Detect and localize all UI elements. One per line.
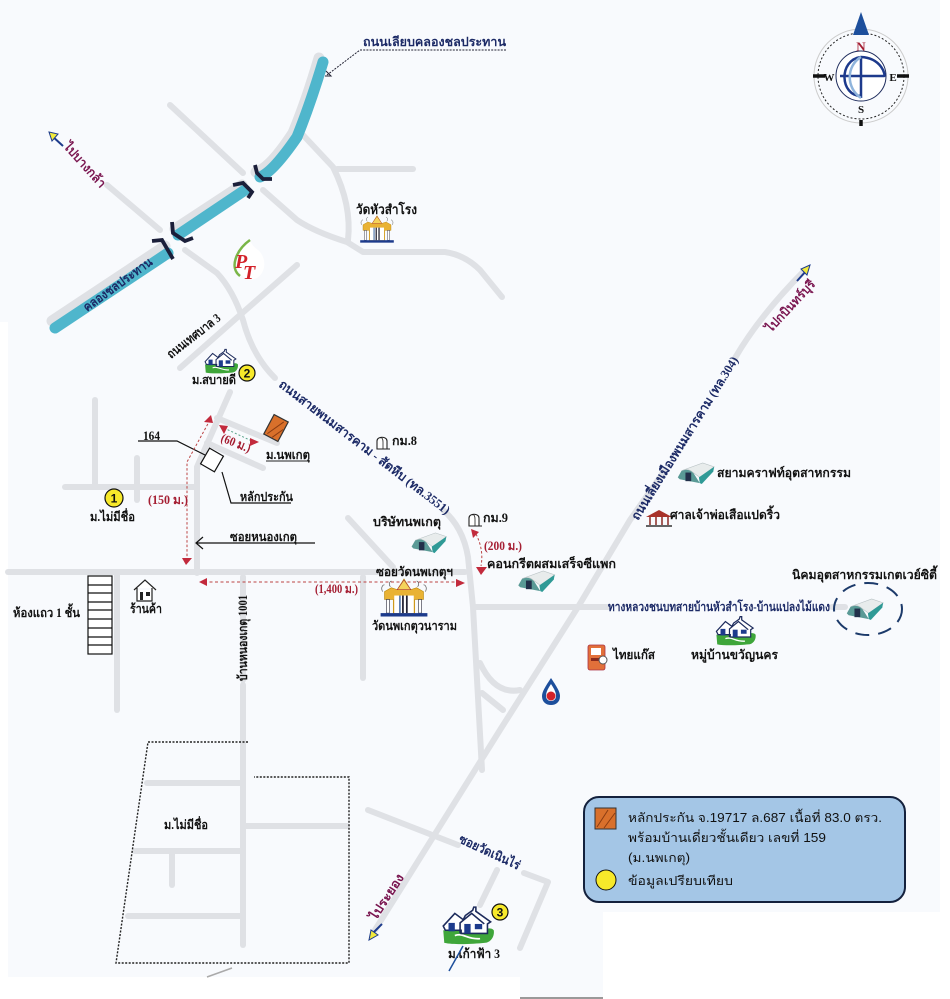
subject parcel [264, 415, 288, 441]
label: Soi Nong Ket arrow: ซอยหนองเกตุ [230, 530, 297, 545]
legend text: parcel: พร้อมบ้านเดี่ยวชั้นเดียว เลขที่ 159 [628, 828, 826, 845]
distance 200 m [471, 529, 522, 575]
compass: S [858, 104, 864, 116]
arrow: to Kabin Buri [797, 265, 810, 281]
label: shop: ร้านค้า [130, 602, 162, 616]
label: Kao Fa 3 [448, 946, 500, 971]
icon: PT logo [234, 240, 264, 284]
km 8 [377, 434, 417, 449]
badge 2: 2 [244, 366, 251, 380]
callout: collateral: หลักประกัน [240, 490, 293, 504]
factory: Siam Kraft: สยามคราฟท์อุตสาหกรรม [717, 465, 851, 481]
village 3 [443, 907, 494, 944]
label: Wat Nopphaket: วัดนพเกตุวนาราม [372, 619, 457, 634]
distance 1400 m [199, 578, 465, 596]
badge 3: 3 [497, 906, 504, 920]
compass: E [889, 72, 897, 84]
industrial estate: นิคมอุตสาหกรรมเกตเวย์ซิตี้ [792, 565, 938, 583]
label: Sabaidee village: ม.สบายดี [192, 373, 236, 387]
factory: Nopphaket company [373, 515, 446, 553]
label: municipal road 3: ถนนเทศบาล 3 [164, 311, 223, 361]
shrine: ศาลเจ้าพ่อเสือแปดริ้ว [670, 505, 780, 522]
shrine [646, 505, 780, 526]
legend text: parcel: หลักประกัน จ.19717 ล.687 เนื้อที่ 83.0 ตรว. [628, 808, 882, 825]
label: canal name: คลองชลประทาน [81, 255, 155, 314]
label: highway 304: ถนนเลี่ยงเมืองพนมสารคาม (ทล.304) [627, 353, 741, 523]
label: canal road: ถนนเลียบคลองชลประทาน [363, 35, 506, 49]
label: unnamed village 1: ม.ไม่มีชื่อ [90, 508, 135, 524]
distance 60 m: (60 ม.) [219, 431, 253, 455]
label: row houses: ห้องแถว 1 ชั้น [13, 603, 80, 620]
scan mark [207, 968, 232, 977]
legend text: parcel [628, 808, 882, 866]
distance 1400 m: (1,400 ม.) [315, 582, 358, 596]
label: highway 3551: ถนนสายพนมสารคาม - สัตหีบ (ทล.3551) [276, 377, 453, 517]
legend swatch: comparison [596, 870, 616, 890]
legend swatch: parcel [595, 808, 616, 829]
gas station: ไทยแก๊ส [611, 647, 655, 662]
icon: Wat Nopphaket [381, 579, 427, 617]
factory: Nopphaket company: บริษัทนพเกตุ [373, 515, 441, 530]
icon: PT logo: P [234, 251, 248, 273]
label: to Bang Khla: ไปบางกล้า [59, 138, 109, 191]
industrial estate [792, 565, 938, 635]
distance 150 m [148, 415, 213, 565]
distance 200 m: (200 ม.) [484, 539, 522, 553]
label: to Kabin Buri: ไปกบินทร์บุรี [761, 276, 819, 337]
icon: PTT [542, 678, 560, 705]
label: Ban Nong Ket road: บ้านหนองเกตุ 1001 [236, 595, 251, 681]
label: Wat Hua Samrong: วัดหัวสำโรง [356, 201, 417, 217]
km 9 [469, 511, 508, 526]
label: Soi Nong Ket arrow [196, 530, 315, 549]
distance 150 m: (150 ม.) [148, 493, 188, 507]
label: canal road [325, 35, 506, 76]
label: rural highway: ทางหลวงชนบทสายบ้านหัวสำโรง-บ้านแปลงไม้แดง [608, 599, 830, 614]
km 9: กม.9 [483, 511, 508, 525]
label: Kao Fa 3: ม.เก้าฟ้า 3 [448, 947, 500, 961]
village: Khwan Nakhon [691, 617, 778, 663]
legend text: parcel: (ม.นพเกตุ) [628, 851, 690, 866]
callout: collateral [222, 472, 293, 504]
icon: shop [134, 580, 156, 601]
label: Soi Wat Nopphaket: ซอยวัดนพเกตุฯ [376, 565, 453, 580]
arrow: to Rayong [369, 924, 382, 940]
compass [813, 12, 909, 126]
arrow: to Bang Khla [49, 132, 63, 146]
canal [55, 62, 323, 328]
factory: CPAC concrete: คอนกรีตผสมเสร็จซีแพก [487, 556, 616, 571]
badge 3 [492, 904, 508, 920]
bridge brackets [152, 165, 272, 259]
compass: N [856, 39, 866, 54]
factory: Siam Kraft [678, 463, 851, 484]
gas station [588, 645, 655, 670]
factory: CPAC concrete [487, 556, 616, 592]
plot 164: 164 [143, 429, 161, 443]
badge 1: 1 [111, 492, 118, 506]
icon: PT logo: T [243, 262, 256, 284]
label: Nopphaket village: ม.นพเกตุ [266, 448, 310, 463]
icon: village 2 [205, 349, 238, 373]
legend panel [584, 797, 905, 902]
village: Khwan Nakhon: หมู่บ้านขวัญนคร [691, 648, 778, 663]
badge 1 [105, 489, 123, 507]
label: to Rayong: ไประยอง [365, 871, 407, 924]
row houses block [88, 576, 112, 654]
icon: temple small [360, 216, 394, 243]
legend text: comparison: ข้อมูลเปรียบเทียบ [628, 874, 733, 889]
road network [8, 58, 845, 948]
label: unnamed estate: ม.ไม่มีชื่อ [164, 816, 208, 832]
badge 2 [239, 365, 255, 381]
compass: W [824, 72, 834, 84]
km 8: กม.8 [392, 434, 417, 448]
plot 164 [138, 429, 223, 472]
dotted estate boundary [116, 742, 349, 963]
label: Soi Wat Noen Rai: ซอยวัดเนินไร่ [457, 831, 523, 873]
